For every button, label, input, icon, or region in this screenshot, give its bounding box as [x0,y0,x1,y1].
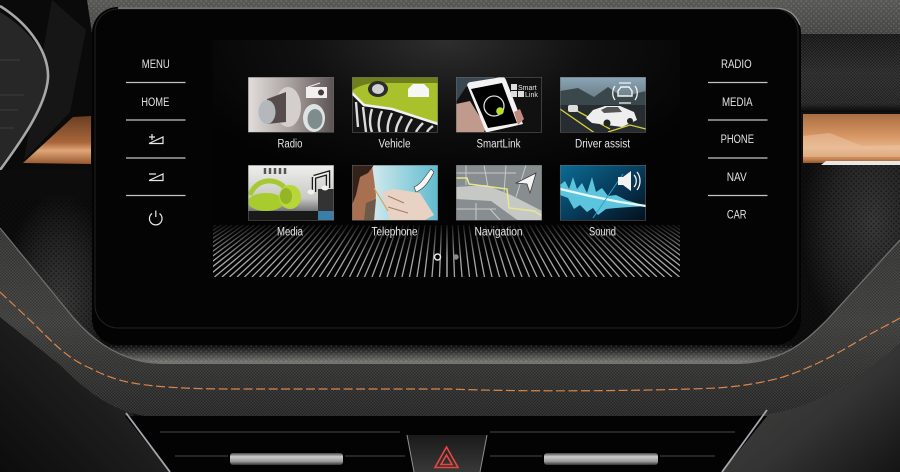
label: Sound: Sound [589,227,616,239]
right hardware buttons [708,59,768,222]
page indicator dots [434,254,459,260]
tile: Vehicle [352,77,438,150]
icon: hazard triangle [435,447,458,468]
right textured panel [790,34,900,360]
tile: Sound [560,165,646,239]
left hardware buttons [126,59,186,225]
button: RADIO: RADIO [721,59,752,71]
label: Telephone: Telephone [372,227,418,239]
label: Navigation: Navigation [474,227,522,239]
display panel [213,40,680,277]
label: Radio: Radio [278,138,302,150]
tile: SmartLink [456,77,542,150]
stripe floor graphic [213,224,680,277]
display glow [213,40,680,277]
surface under the screen [100,345,810,364]
label: Driver assist: Driver assist [575,138,631,150]
tile: Telephone [352,165,438,239]
air vents [125,410,767,472]
label: Vehicle: Vehicle [378,138,410,150]
lower leather left [0,300,172,472]
screen bezel [92,7,801,345]
left vent surround [0,0,93,192]
tile: Driver assist [560,77,646,150]
button: CAR: CAR [727,210,747,222]
label: Media: Media [277,227,303,239]
icon: volume up [149,134,163,144]
tile: SmartLink: Link [525,92,538,99]
stitched padded band [0,228,900,417]
left vent knob [230,453,343,465]
left copper trim [23,116,91,164]
tile: Media [248,165,334,239]
tile: Radio [248,77,334,150]
lower leather right [722,330,900,472]
tile: SmartLink: Smart [518,85,537,92]
right copper trim [803,114,900,165]
button: MENU: MENU [142,59,170,71]
label: SmartLink: SmartLink [476,138,521,150]
icon: power [149,210,162,225]
icon: volume down [149,174,163,180]
button: PHONE: PHONE [721,134,754,146]
tile: Navigation [456,165,542,239]
button: HOME: HOME [141,97,170,109]
hazard button [407,435,487,472]
orange stitching [0,292,900,391]
right vent knob [544,453,658,465]
upper grey trim [87,0,900,36]
left dotted panel [0,170,100,360]
button: NAV: NAV [727,172,747,184]
button: MEDIA: MEDIA [722,97,753,109]
